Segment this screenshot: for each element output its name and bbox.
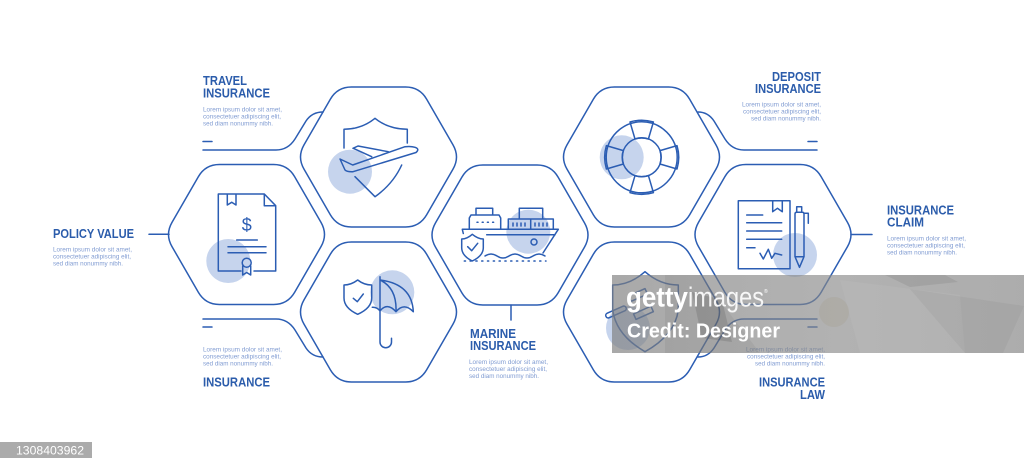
policy heading: POLICY VALUE [53, 227, 134, 241]
claim heading: INSURANCE [887, 203, 954, 217]
watermark logo: getty [626, 282, 688, 312]
policy body text: consectetuer adipiscing elit, [53, 254, 131, 260]
law connector [698, 319, 817, 357]
insurance body text: sed diam nonummy nibh. [203, 360, 273, 368]
watermark logo: ® [764, 288, 768, 295]
insurance heading: INSURANCE [203, 376, 270, 390]
insurance body text: consectetuer adipiscing elit, [203, 354, 281, 360]
marine hexagon [432, 165, 588, 305]
marine heading [470, 327, 536, 353]
travel body text: sed diam nonummy nibh. [203, 120, 273, 128]
watermark logo: images [688, 282, 764, 312]
law body text: Lorem ipsum dolor sit amet, [746, 347, 825, 354]
watermark banner [612, 275, 1024, 353]
marine heading: MARINE [470, 327, 516, 341]
icon: life ring [600, 120, 679, 194]
image id badge [0, 442, 92, 458]
law body text: sed diam nonummy nibh. [755, 361, 825, 368]
policy body text: sed diam nonummy nibh. [53, 260, 123, 268]
deposit body text: Lorem ipsum dolor sit amet, [742, 102, 821, 108]
icon: cargo ship [462, 208, 558, 261]
insurance hexagon [300, 242, 456, 382]
law body text [746, 347, 825, 368]
law heading [759, 376, 825, 402]
image id badge: 1308403962 [16, 445, 84, 457]
deposit heading [755, 70, 821, 96]
panel: marine insurance [432, 165, 588, 380]
marine connector [510, 305, 512, 320]
law heading: LAW [800, 388, 825, 402]
travel body text: consectetuer adipiscing elit, [203, 114, 281, 120]
travel heading: INSURANCE [203, 86, 270, 100]
marine body text: sed diam nonummy nibh. [469, 373, 539, 380]
watermark credit: Credit: Designer [627, 320, 780, 342]
deposit heading: DEPOSIT [772, 70, 821, 84]
policy connector [149, 233, 169, 235]
claim body text: sed diam nonummy nibh. [887, 249, 957, 256]
claim body text: consectetuer adipiscing elit, [887, 242, 965, 249]
travel heading [203, 74, 270, 100]
insurance body text: Lorem ipsum dolor sit amet, [203, 346, 282, 354]
marine heading: INSURANCE [470, 339, 536, 353]
travel hexagon [300, 87, 456, 227]
panel: insurance law [564, 242, 825, 402]
travel connector [203, 112, 323, 150]
deposit body text: sed diam nonummy nibh. [751, 116, 821, 122]
panel: travel insurance [203, 74, 456, 227]
law body text: consectetuer adipiscing elit, [747, 354, 825, 361]
claim connector [851, 234, 872, 236]
claim hexagon [695, 164, 851, 304]
icon: policy document [206, 194, 276, 283]
insurance connector [203, 319, 323, 357]
deposit heading: INSURANCE [755, 82, 821, 96]
travel body text [203, 106, 282, 128]
panel: deposit insurance [564, 70, 821, 227]
law hexagon [564, 242, 720, 382]
icon: shield and gavel [605, 272, 678, 352]
deposit body text: consectetuer adipiscing elit, [743, 108, 821, 116]
panel: insurance claim [695, 164, 966, 304]
law heading: INSURANCE [759, 376, 825, 390]
policy body text [53, 246, 132, 268]
claim heading [887, 203, 954, 230]
claim body text [887, 235, 966, 256]
policy body text: Lorem ipsum dolor sit amet, [53, 246, 132, 254]
icon: claim document and pen [738, 201, 817, 277]
deposit connector [698, 112, 817, 150]
travel heading: TRAVEL [203, 74, 247, 88]
travel body text: Lorem ipsum dolor sit amet, [203, 106, 282, 114]
panel: insurance [203, 242, 456, 390]
marine body text: Lorem ipsum dolor sit amet, [469, 359, 548, 366]
deposit hexagon [564, 87, 720, 227]
marine body text [469, 359, 548, 380]
icon: shield with airplane [328, 118, 418, 197]
watermark logo [626, 282, 768, 312]
marine body text: consectetuer adipiscing elit, [469, 366, 547, 373]
claim body text: Lorem ipsum dolor sit amet, [887, 235, 966, 242]
policy hexagon [168, 164, 324, 304]
icon: shield and umbrella [344, 270, 414, 348]
deposit body text [742, 102, 821, 122]
icon: policy document: $ [242, 215, 252, 235]
panel: policy value [53, 164, 324, 304]
insurance body text [203, 346, 282, 368]
claim heading: CLAIM [887, 216, 924, 230]
